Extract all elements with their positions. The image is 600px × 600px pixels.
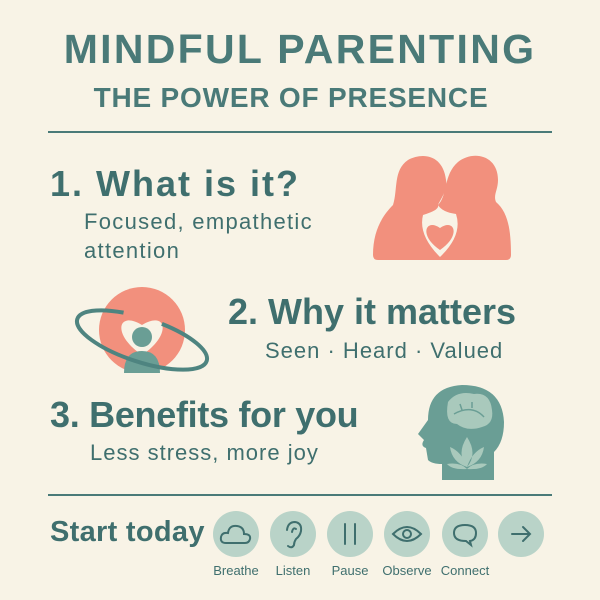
icon: child in heart with orbit [74,287,210,373]
action icons row: Observe [382,563,432,578]
action icons row: Listen [276,563,310,578]
action icons row: Connect [441,563,490,578]
action icons row: Breathe [213,563,259,578]
text: benefits: Less stress, more joy [90,440,319,465]
icon: couple with heart [373,156,511,260]
subtitle: THE POWER OF PRESENCE [94,82,488,113]
action icons row: Pause [332,563,368,578]
text: what is it: attention [84,238,180,263]
heading: why it matters: 2. Why it matters [228,291,516,332]
text: what is it [84,209,313,263]
heading: benefits: 3. Benefits for you [50,394,358,435]
title: MINDFUL PARENTING [64,26,536,72]
icon: head with brain and lotus [418,385,504,480]
heading: start today: Start today [50,516,205,548]
text: what is it: Focused, empathetic [84,209,313,234]
action icons row [213,511,544,578]
text: seen heard valued: Seen · Heard · Valued [265,338,503,363]
heading: what is it: 1. What is it? [50,163,300,204]
